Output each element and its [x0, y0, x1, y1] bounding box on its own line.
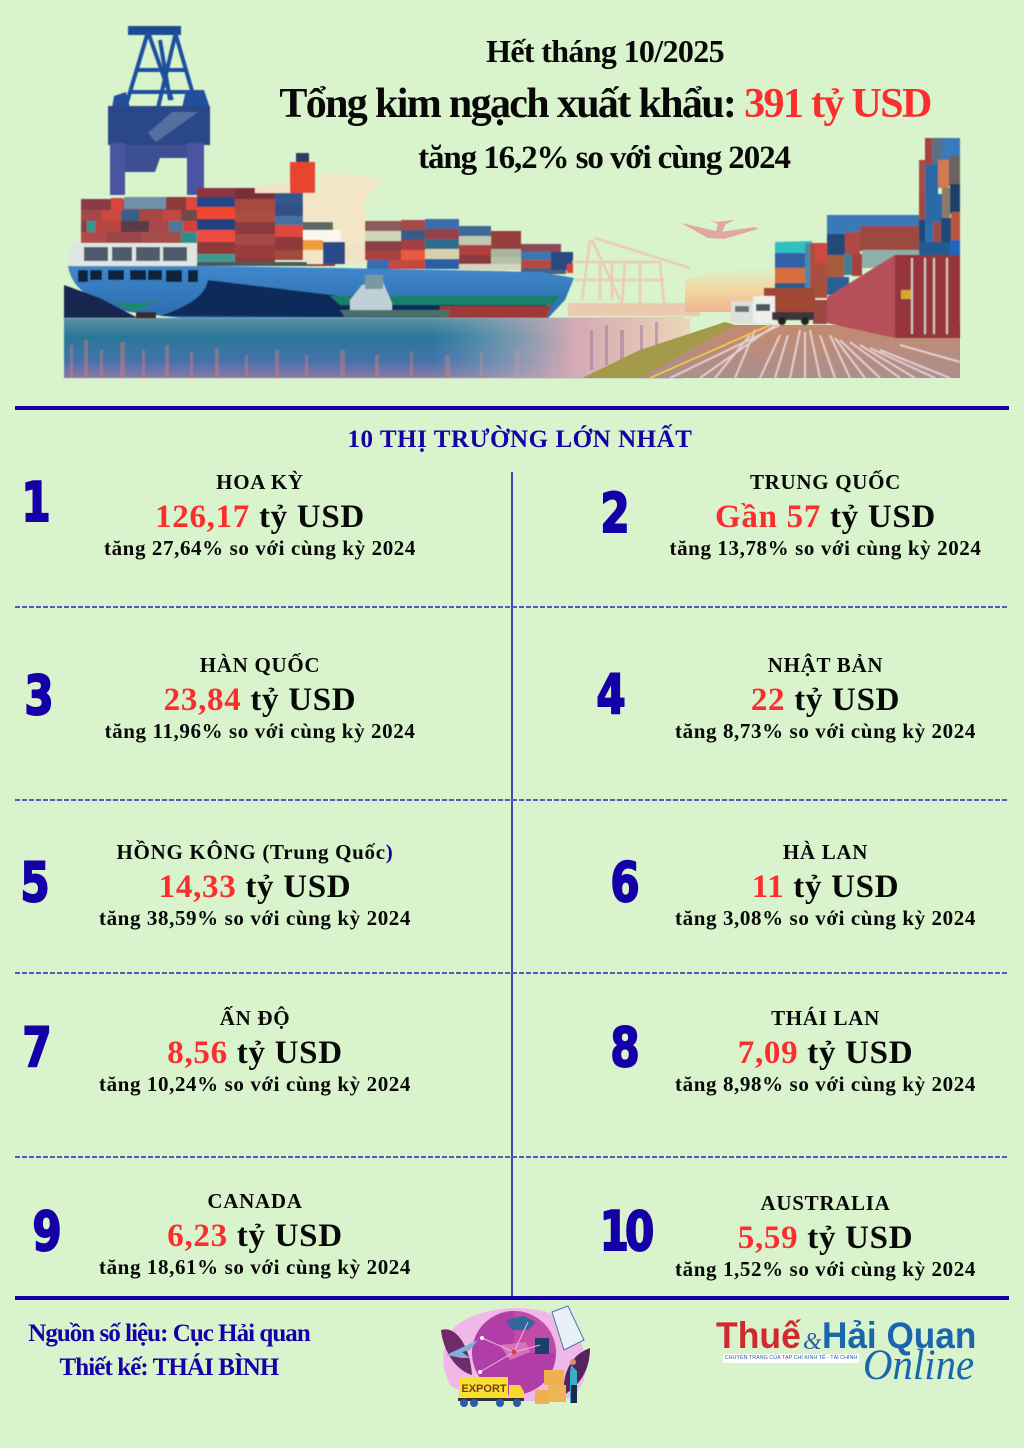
rank 2 number: 2: [600, 482, 630, 545]
bottom rule: [15, 1296, 1009, 1300]
market 2: Trung Quốc: Gần 57 tỷ USD: [715, 499, 936, 535]
market 3: Hàn Quốc: tăng 11,96% so với cùng kỳ 2024: [105, 719, 415, 743]
market 1: Hoa Kỳ: 126,17 tỷ USD: [155, 499, 365, 535]
market 6: Hà Lan: tăng 3,08% so với cùng kỳ 2024: [675, 906, 976, 930]
market 9: Canada: [99, 1189, 411, 1279]
market 8: Thái Lan: THÁI LAN: [771, 1006, 880, 1030]
publication logo: [716, 1315, 976, 1389]
rank 3 number: 3: [24, 664, 54, 727]
export illustration: EXPORT: [461, 1383, 507, 1395]
source credit: Nguồn số liệu: Cục Hải quan: [28, 1320, 310, 1347]
market 10: Australia: tăng 1,52% so với cùng kỳ 2024: [675, 1257, 976, 1281]
airplane: [681, 219, 758, 239]
market 3: Hàn Quốc: 23,84 tỷ USD: [164, 682, 356, 718]
market 1: Hoa Kỳ: HOA KỲ: [216, 470, 304, 494]
heading: total export value: Tổng kim ngạch xuất khẩu: 391 tỷ USD: [279, 81, 931, 127]
rank 6 number: 6: [610, 851, 640, 914]
market 4: Nhật Bản: tăng 8,73% so với cùng kỳ 2024: [675, 719, 976, 743]
rank 1 number: 1: [21, 471, 51, 534]
market 1: Hoa Kỳ: tăng 27,64% so với cùng kỳ 2024: [104, 536, 416, 560]
market 6: Hà Lan: HÀ LAN: [783, 840, 868, 864]
aft container stacks: [81, 188, 335, 266]
road and grass: [582, 322, 960, 378]
rank 4 number: 4: [596, 663, 626, 726]
market 10: Australia: [675, 1191, 976, 1281]
market 10: Australia: 5,59 tỷ USD: [738, 1220, 913, 1256]
rank 8 number: 8: [610, 1016, 640, 1079]
publication logo: &: [803, 1329, 822, 1355]
water reflection: [64, 318, 690, 378]
market 9: Canada: CANADA: [207, 1189, 303, 1213]
ship hull: [64, 266, 574, 319]
forward containers: [365, 219, 573, 274]
market 7: Ấn Độ: tăng 10,24% so với cùng kỳ 2024: [99, 1072, 411, 1096]
market 9: Canada: tăng 18,61% so với cùng kỳ 2024: [99, 1255, 411, 1279]
distant port cranes: [568, 238, 700, 316]
market 4: Nhật Bản: [675, 653, 976, 743]
export illustration: [441, 1305, 590, 1407]
market 6: Hà Lan: 11 tỷ USD: [752, 869, 899, 905]
tugboat: [340, 275, 450, 317]
section title: 10 THỊ TRƯỜNG LỚN NHẤT: [347, 426, 693, 453]
publication logo: CHUYÊN TRANG CỦA TẠP CHÍ KINH TẾ - TÀI CHÍNH: [725, 1355, 857, 1361]
publication logo: Online: [863, 1342, 974, 1389]
market 2: Trung Quốc: [669, 470, 982, 560]
market 4: Nhật Bản: 22 tỷ USD: [751, 682, 900, 718]
market 2: Trung Quốc: tăng 13,78% so với cùng kỳ 2024: [669, 536, 982, 560]
heading: period: Hết tháng 10/2025: [486, 33, 724, 69]
market 7: Ấn Độ: ẤN ĐỘ: [220, 1006, 290, 1030]
heading: growth rate: tăng 16,2% so với cùng 2024: [418, 140, 790, 176]
market 4: Nhật Bản: NHẬT BẢN: [768, 653, 883, 677]
rank 9 number: 9: [32, 1200, 62, 1263]
designer credit: Thiết kế: THÁI BÌNH: [60, 1354, 278, 1381]
sunset sky: [685, 268, 775, 312]
market 3: Hàn Quốc: HÀN QUỐC: [200, 653, 320, 677]
aft lashing deck with windows: [70, 243, 307, 267]
rank 5 number: 5: [20, 851, 50, 914]
market 6: Hà Lan: [675, 840, 976, 930]
market 9: Canada: 6,23 tỷ USD: [167, 1218, 343, 1254]
hero image: container ship and port: [63, 25, 961, 379]
market 8: Thái Lan: tăng 8,98% so với cùng kỳ 2024: [675, 1072, 976, 1096]
superstructure: [255, 153, 384, 264]
large red container: [813, 255, 960, 338]
market 5: Hồng Kông: tăng 38,59% so với cùng kỳ 2024: [99, 906, 411, 930]
stacked containers: [775, 138, 960, 298]
market 10: Australia: AUSTRALIA: [760, 1191, 890, 1215]
market 2: Trung Quốc: TRUNG QUỐC: [750, 470, 901, 494]
market 8: Thái Lan: 7,09 tỷ USD: [738, 1035, 913, 1071]
rank 10 number: 10: [600, 1200, 650, 1263]
market 8: Thái Lan: [675, 1006, 976, 1096]
market 5: Hồng Kông: 14,33 tỷ USD: [159, 869, 351, 905]
market 5: Hồng Kông: HỒNG KÔNG (Trung Quốc): [117, 840, 393, 864]
market 7: Ấn Độ: [99, 1006, 411, 1096]
market 5: Hồng Kông: [99, 840, 411, 930]
market 3: Hàn Quốc: [104, 653, 415, 743]
market 7: Ấn Độ: 8,56 tỷ USD: [167, 1035, 343, 1071]
trucks: [731, 288, 815, 325]
publication logo: Hải Quan: [822, 1315, 976, 1356]
top rule: [15, 406, 1009, 410]
publication logo: Thuế: [716, 1315, 801, 1356]
market 1: Hoa Kỳ: [104, 470, 416, 560]
crane: [108, 26, 210, 195]
rank 7 number: 7: [22, 1016, 52, 1079]
